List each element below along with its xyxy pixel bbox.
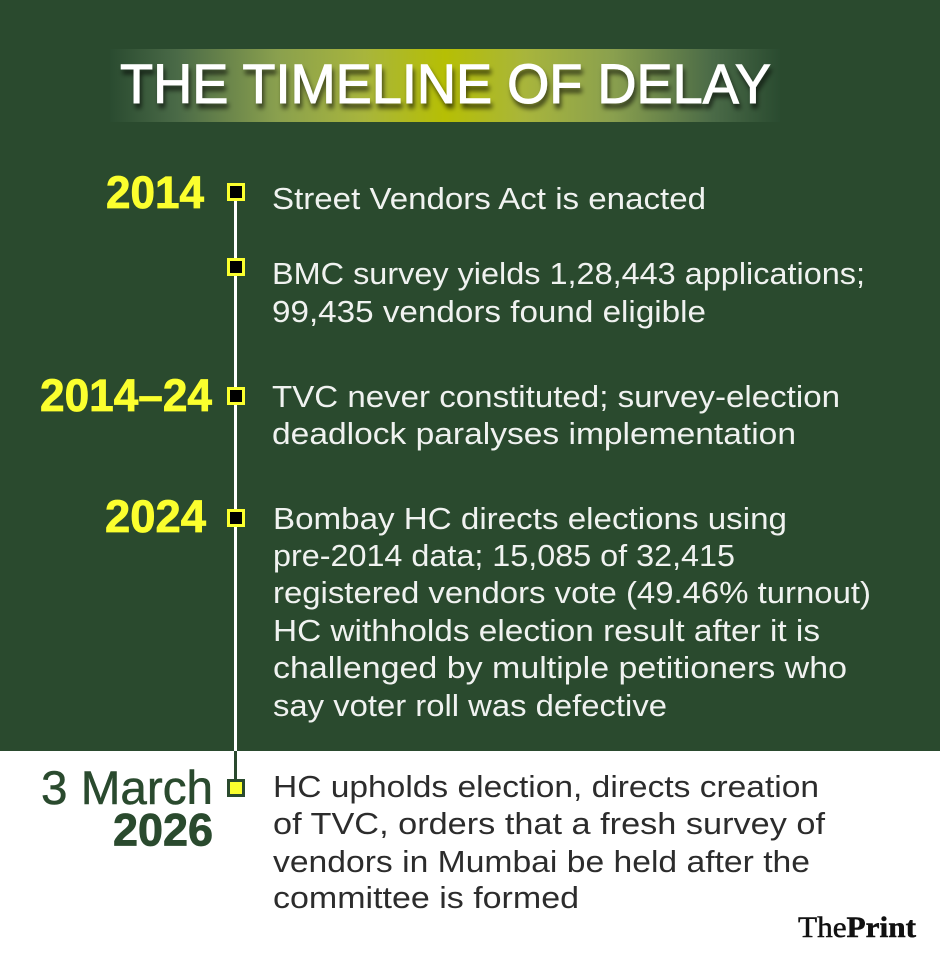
entry: 3 March 2026: 2026 bbox=[113, 804, 213, 856]
entry: 2024: registered vendors vote (49.46% turnout) bbox=[273, 575, 871, 610]
panel: green background bbox=[0, 0, 940, 751]
entry: 2024 bbox=[105, 491, 871, 723]
entry: 3 March 2026: 3 March bbox=[41, 761, 213, 814]
entry: 2014 enacted: 2014 bbox=[106, 167, 204, 218]
logo: ThePrint: ThePrint bbox=[798, 911, 916, 944]
entry: 3 March 2026 bbox=[41, 761, 825, 915]
entry: 2014–24: 2014–24 bbox=[40, 370, 212, 421]
entry: BMC survey bbox=[228, 256, 865, 329]
entry: 2024: HC withholds election result after it is bbox=[273, 613, 820, 648]
entry: 2014–24: deadlock paralyses implementation bbox=[272, 416, 796, 451]
entry: 2024: 2024 bbox=[105, 491, 206, 542]
entry: 2024: Bombay HC directs elections using bbox=[273, 501, 787, 536]
entry: 2024: challenged by multiple petitioners who bbox=[273, 650, 847, 685]
entry: 3 March 2026: of TVC, orders that a fresh survey of bbox=[273, 806, 825, 841]
entry: 2014 enacted: Street Vendors Act is enacted bbox=[272, 181, 706, 216]
panel: white background bbox=[0, 751, 940, 970]
timeline axis bbox=[234, 192, 237, 788]
entry: BMC survey: 99,435 vendors found eligible bbox=[272, 294, 706, 329]
title: THE TIMELINE OF DELAY bbox=[120, 52, 771, 115]
entry: 2014–24 bbox=[40, 370, 840, 451]
entry: BMC survey: BMC survey yields 1,28,443 applications; bbox=[272, 256, 865, 291]
entry: 2014 enacted bbox=[106, 167, 706, 218]
entry: 2014–24: TVC never constituted; survey-election bbox=[272, 379, 840, 414]
entry: 2024: say voter roll was defective bbox=[273, 688, 667, 723]
entry: 2024: pre-2014 data; 15,085 of 32,415 bbox=[273, 538, 735, 573]
entry: 3 March 2026: committee is formed bbox=[273, 880, 579, 915]
entry: 3 March 2026: HC upholds election, directs creation bbox=[273, 769, 819, 804]
entry: 3 March 2026: vendors in Mumbai be held after the bbox=[273, 844, 810, 879]
